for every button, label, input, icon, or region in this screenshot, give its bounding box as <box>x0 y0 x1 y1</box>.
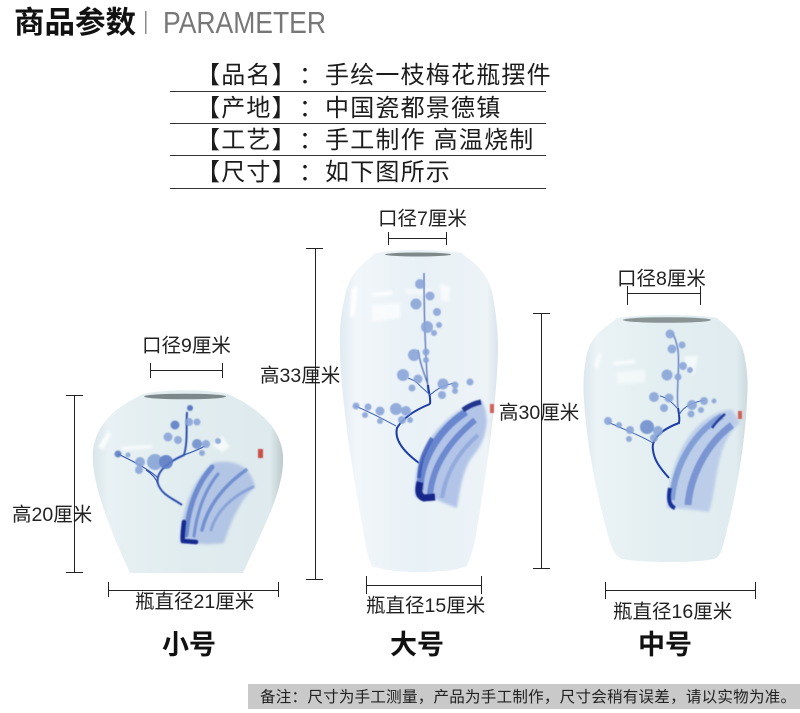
vase: large <box>340 250 498 572</box>
vase body <box>93 390 283 573</box>
mouth label: 口径8厘米 <box>617 268 706 290</box>
mouth label: 口径9厘米 <box>142 335 231 357</box>
vase mouth <box>385 252 451 256</box>
divider bar <box>145 11 146 34</box>
diameter label: 瓶直径16厘米 <box>613 601 732 623</box>
row: craft: 手工制作 高温烧制 <box>325 127 534 154</box>
heading: Chinese: 商品参数 <box>14 6 136 40</box>
painting: brush strokes <box>180 462 255 544</box>
diameter bracket <box>605 582 756 599</box>
row: name <box>196 62 552 89</box>
size name: 中号 <box>638 630 692 660</box>
footnote bar: 备注：尺寸为手工测量，产品为手工制作，尺寸会稍有误差，请以实物为准。 <box>260 688 796 706</box>
footnote bar <box>248 684 800 709</box>
row: name: 手绘一枝梅花瓶摆件 <box>325 62 552 89</box>
height label: 高20厘米 <box>12 504 92 526</box>
diameter label: 瓶直径21厘米 <box>135 591 254 613</box>
painting: plum branch <box>352 273 474 463</box>
mouth label: 口径7厘米 <box>378 208 467 230</box>
row: origin: 【产地】 <box>196 95 297 122</box>
vase body <box>583 315 748 562</box>
row: name: ： <box>299 62 324 89</box>
row: craft: ： <box>299 127 324 154</box>
red seal <box>738 411 742 419</box>
row: origin: ： <box>299 95 324 122</box>
size name: 大号 <box>390 630 444 660</box>
height bracket <box>306 248 323 580</box>
row: size: 【尺寸】 <box>196 159 297 186</box>
mouth bracket <box>627 286 701 305</box>
diameter label: 瓶直径15厘米 <box>366 595 485 617</box>
size name: 小号 <box>162 630 216 660</box>
row: size: 如下图所示 <box>325 159 451 186</box>
height label: 高33厘米 <box>260 365 340 387</box>
row: name: 【品名】 <box>196 62 297 89</box>
heading: English: PARAMETER <box>163 5 326 40</box>
glaze highlights <box>350 284 450 322</box>
title <box>14 5 326 40</box>
mouth bracket <box>150 363 223 378</box>
parameter table <box>170 62 552 188</box>
dimensions: large vase <box>260 208 485 660</box>
red seal <box>258 449 263 458</box>
vase body <box>340 250 498 572</box>
glaze highlights <box>98 431 230 452</box>
red seal <box>490 404 494 413</box>
diameter bracket <box>366 576 482 594</box>
mouth bracket <box>388 232 447 245</box>
row: size <box>196 159 451 186</box>
dimensions: medium vase <box>499 268 756 660</box>
vase mouth <box>623 317 711 323</box>
height bracket <box>533 313 550 568</box>
diameter bracket <box>108 582 279 597</box>
row: origin: 中国瓷都景德镇 <box>325 95 501 122</box>
painting: plum branch <box>604 330 716 478</box>
row: craft: 【工艺】 <box>196 127 297 154</box>
vase: small <box>93 390 283 573</box>
vase: medium <box>583 315 748 562</box>
vase mouth <box>144 394 226 399</box>
row: origin <box>196 95 501 122</box>
painting: brush strokes <box>667 410 740 512</box>
row: craft <box>196 127 534 154</box>
row: size: ： <box>299 159 324 186</box>
dimensions: small vase <box>12 335 279 660</box>
height bracket <box>66 395 83 572</box>
glaze highlights <box>594 352 698 384</box>
height label: 高30厘米 <box>499 402 579 424</box>
painting: plum branch <box>114 405 221 505</box>
painting: brush strokes <box>415 400 487 508</box>
